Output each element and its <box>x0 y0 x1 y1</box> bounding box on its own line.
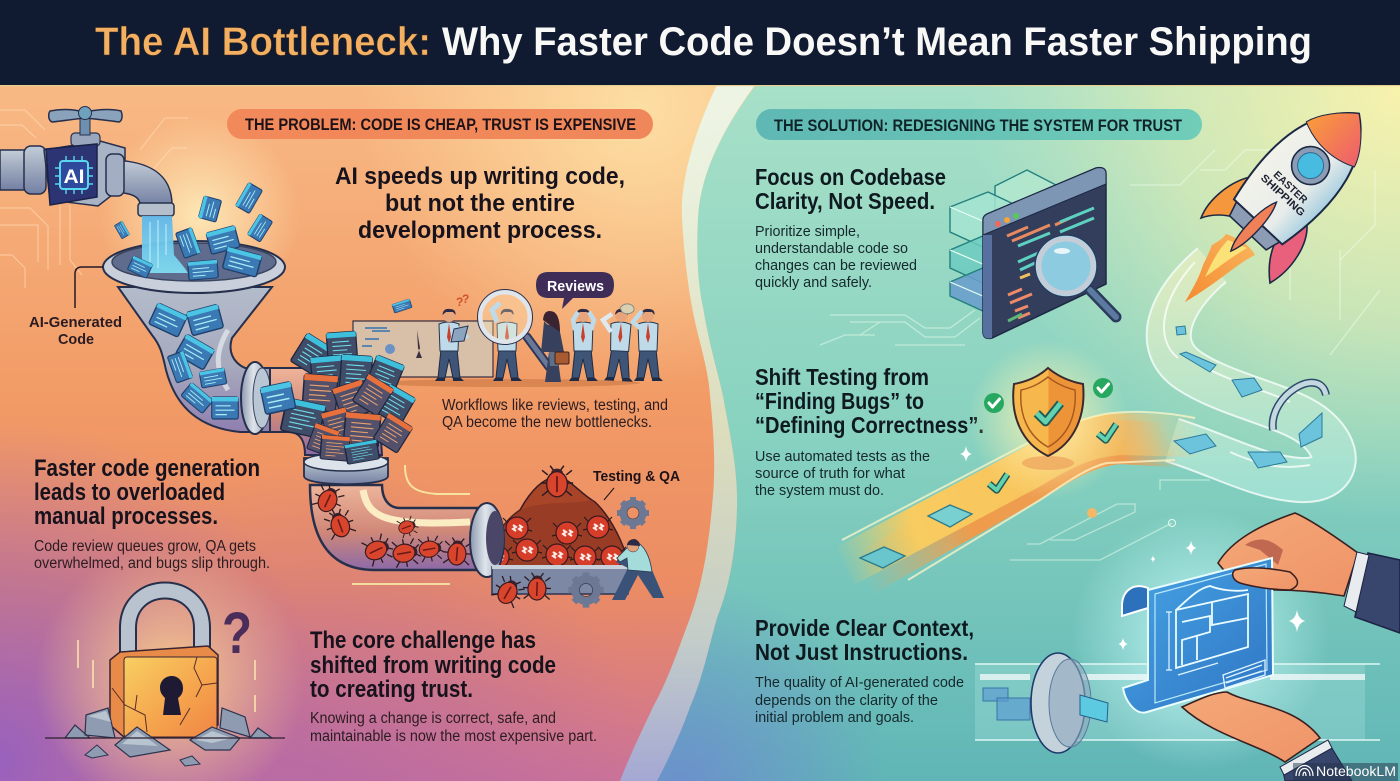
text block: clear context <box>755 615 974 726</box>
person with tablet: ? <box>456 295 463 309</box>
text block: core challenge: Knowing a change is correct, safe, and <box>310 710 556 727</box>
title banner: Why Faster Code Doesn’t Mean Faster Shipping <box>442 20 1312 64</box>
ring on trail <box>1273 383 1326 430</box>
AI chip plate: AI <box>64 167 84 188</box>
text block: workflows: QA become the new bottlenecks. <box>442 414 652 431</box>
heading pill: the solution: THE SOLUTION: REDESIGNING THE SYSTEM FOR TRUST <box>774 117 1182 135</box>
rocket body: EASTER <box>1271 169 1310 206</box>
text block: core challenge: shifted from writing code <box>310 652 556 679</box>
text block: core challenge: The core challenge has <box>310 627 536 654</box>
text block: clear context: depends on the clarity of the <box>755 692 938 709</box>
bug pile <box>487 476 630 567</box>
AI chip plate <box>46 144 97 205</box>
funnel cone and curved pipe <box>118 287 310 432</box>
text block: core challenge: to creating trust. <box>310 676 473 703</box>
browser window <box>983 168 1106 338</box>
text block: AI speeds up: AI speeds up writing code, <box>335 163 625 190</box>
text block: faster code generation: manual processes. <box>34 503 218 530</box>
lower sleeve <box>1282 745 1352 781</box>
magnifier <box>1035 235 1116 317</box>
rocket body <box>1202 87 1388 278</box>
fins <box>1201 176 1255 218</box>
text block: codebase clarity: quickly and safely. <box>755 274 872 291</box>
illustration: whiteboard and overloaded reviewers <box>353 290 663 387</box>
heading pill: the problem <box>227 109 653 139</box>
text block: codebase clarity: Clarity, Not Speed. <box>755 188 935 214</box>
reviewer with hand on head <box>633 309 663 381</box>
cards on path <box>860 547 905 568</box>
panel: problem side background <box>0 85 900 781</box>
upper hand <box>1218 513 1358 596</box>
badge: NotebookLM: NotebookLM <box>1316 764 1396 779</box>
text block: faster code generation: Code review queues grow, QA gets <box>34 538 256 555</box>
text block: codebase clarity: Prioritize simple, <box>755 223 860 240</box>
illustration: funnel with code cards <box>103 182 310 434</box>
text block: shift testing: source of truth for what <box>755 465 906 482</box>
badge: NotebookLM <box>1293 763 1398 781</box>
text block: shift testing: “Defining Correctness”. <box>755 412 984 438</box>
exhaust trail <box>1164 262 1334 480</box>
text block: AI speeds up <box>335 163 625 244</box>
speech bubble: Reviews <box>536 272 614 309</box>
text block: shift testing: Use automated tests as the <box>755 448 930 465</box>
stacked glass cubes <box>950 170 1058 312</box>
label: AI-Generated Code: Code <box>58 331 94 348</box>
text block: faster code generation: leads to overloaded <box>34 479 225 506</box>
lower hand <box>1182 692 1320 762</box>
title banner <box>0 0 1400 86</box>
text block: faster code generation: overwhelmed, and bugs slip through. <box>34 555 270 572</box>
person with tablet <box>435 292 469 381</box>
divider: flowing white wave band <box>620 85 755 781</box>
text block: AI speeds up: development process. <box>358 217 602 244</box>
text block: codebase clarity: Focus on Codebase <box>755 164 946 190</box>
label: Testing and QA <box>593 468 680 500</box>
magnifier on reviewer <box>478 290 549 381</box>
text block: shift testing <box>755 364 984 499</box>
pipe into faucet <box>0 150 40 190</box>
illustration: hands holding blueprint <box>1118 513 1400 781</box>
pipe collar <box>241 362 269 434</box>
text block: clear context: initial problem and goals. <box>755 709 914 726</box>
illustration: rocket labelled faster shipping <box>1164 87 1388 480</box>
upper thumb <box>1233 568 1298 590</box>
text block: shift testing: Shift Testing from <box>755 364 929 390</box>
text block: codebase clarity: changes can be reviewed <box>755 257 917 274</box>
text block: codebase clarity <box>755 164 946 291</box>
text block: core challenge <box>310 627 597 745</box>
illustration: bug-filled pipe <box>304 435 664 609</box>
green check badges <box>984 378 1113 413</box>
label: AI-Generated Code: AI-Generated <box>29 314 122 331</box>
illustration: code window with magnifier <box>950 168 1116 338</box>
flying code cards <box>114 182 273 419</box>
label: AI-Generated Code <box>29 267 122 348</box>
text block: clear context: The quality of AI-generated code <box>755 674 964 691</box>
water stream <box>142 216 188 273</box>
woman with briefcase <box>541 311 569 382</box>
illustration: golden verified path with shield <box>842 340 1216 580</box>
text block: shift testing: the system must do. <box>755 482 884 499</box>
checks on path <box>988 424 1118 491</box>
illustration: cracked padlock <box>45 590 285 766</box>
pipe end ring <box>470 503 504 577</box>
blueprint sheet <box>1122 558 1273 713</box>
text block: AI speeds up: but not the entire <box>385 190 575 217</box>
text block: clear context: Provide Clear Context, <box>755 615 974 641</box>
worried reviewer <box>569 309 598 381</box>
person pushing <box>612 541 664 600</box>
rubble <box>65 708 272 757</box>
hunched reviewer <box>603 308 637 382</box>
funnel rim <box>103 241 285 293</box>
text block: shift testing: “Finding Bugs” to <box>755 388 924 414</box>
title banner: The AI Bottleneck: <box>95 20 431 64</box>
flame <box>1185 234 1255 302</box>
rocket body: SHIPPING <box>1258 172 1307 219</box>
illustration: jam of code cards in pipe <box>260 331 416 474</box>
bin <box>492 567 628 594</box>
text block: workflows: Workflows like reviews, testing, and <box>442 397 668 414</box>
person with tablet: ? <box>462 292 469 306</box>
heading pill: the solution <box>756 109 1202 140</box>
heading pill: the problem: THE PROBLEM: CODE IS CHEAP, TRUST IS EXPENSIVE <box>245 116 636 134</box>
illustration: pipe leading to blueprint <box>975 653 1380 753</box>
top collar <box>304 458 388 484</box>
upper sleeve <box>1355 553 1400 633</box>
illustration: AI faucet <box>0 106 174 216</box>
text block: clear context: Not Just Instructions. <box>755 639 968 665</box>
label: Testing and QA: Testing & QA <box>593 468 680 485</box>
question mark: ? <box>222 601 252 666</box>
text block: codebase clarity: understandable code so <box>755 240 908 257</box>
text block: faster code generation <box>34 455 270 572</box>
shield <box>1013 368 1083 456</box>
text block: faster code generation: Faster code generation <box>34 455 260 482</box>
text block: core challenge: maintainable is now the most expensive part. <box>310 728 597 745</box>
panel: solution side background <box>640 85 1400 781</box>
text block: workflows <box>442 397 668 431</box>
pipe ring <box>1031 653 1085 753</box>
speech bubble: Reviews: Reviews <box>547 278 604 295</box>
